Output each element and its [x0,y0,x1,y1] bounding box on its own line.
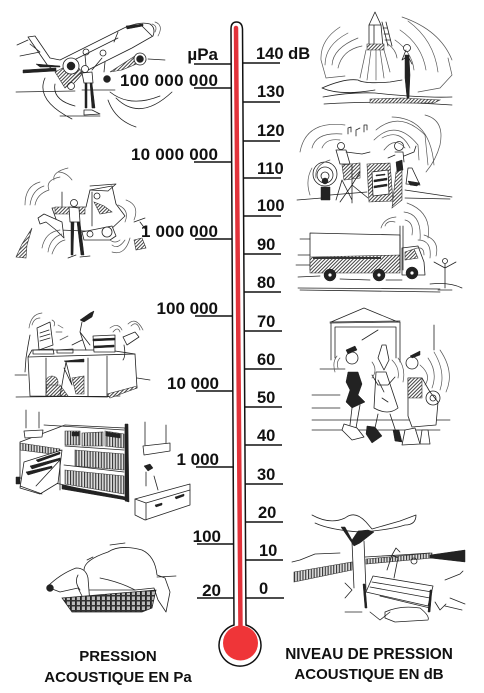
left scale labels in micropascals: 10 000 000 [131,145,218,164]
left scale labels in micropascals: 100 [193,527,221,546]
right scale labels in decibels [256,45,310,598]
illustration: noisy office desk [15,311,150,398]
left scale labels in micropascals: 10 000 [167,374,219,393]
illustration: rocket launch [321,12,452,105]
right scale labels in decibels: 110 [257,160,284,178]
right scale labels in decibels: 130 [257,83,285,101]
right scale labels in decibels: 40 [257,427,275,445]
illustration: park bench with tree [292,515,465,622]
right scale labels in decibels: 10 [259,542,277,560]
right scale labels in decibels: 0 [259,580,268,598]
right scale labels in decibels: 70 [257,313,275,331]
left scale ticks [194,64,234,598]
left scale labels in micropascals: 100 000 000 [120,71,218,90]
right axis title: ACOUSTIQUE EN dB [294,666,444,683]
left axis title: PRESSION [79,648,157,665]
left scale labels in micropascals: 1 000 [176,450,219,469]
illustration: three women chatting [312,308,450,445]
right scale labels in decibels: 120 [257,122,285,140]
illustration: noisy truck [296,203,462,292]
left scale labels in micropascals: 20 [202,581,221,600]
illustration: airplane taking off [16,22,172,127]
right axis title: NIVEAU DE PRESSION [285,646,453,663]
illustration: bulldozer and worker [16,168,146,258]
left scale labels in micropascals [120,45,221,600]
left axis title: ACOUSTIQUE EN Pa [44,669,192,686]
left scale labels in micropascals: µPa [187,45,219,64]
illustration: sleeping dog in basket [46,543,176,612]
right scale labels in decibels: 20 [258,504,276,522]
illustration: band with singer [297,115,452,208]
right scale labels in decibels: 50 [257,389,275,407]
right scale labels in decibels: 90 [257,236,275,254]
right scale labels in decibels: 140 dB [256,45,310,63]
right scale labels in decibels: 60 [257,351,275,369]
illustration: quiet library [16,410,190,520]
right scale labels in decibels: 80 [257,274,275,292]
right scale labels in decibels: 30 [257,466,275,484]
right scale labels in decibels: 100 [257,197,285,215]
thermometer [219,22,261,666]
right scale ticks [243,63,284,598]
left scale labels in micropascals: 1 000 000 [141,222,218,241]
left scale labels in micropascals: 100 000 [157,299,218,318]
